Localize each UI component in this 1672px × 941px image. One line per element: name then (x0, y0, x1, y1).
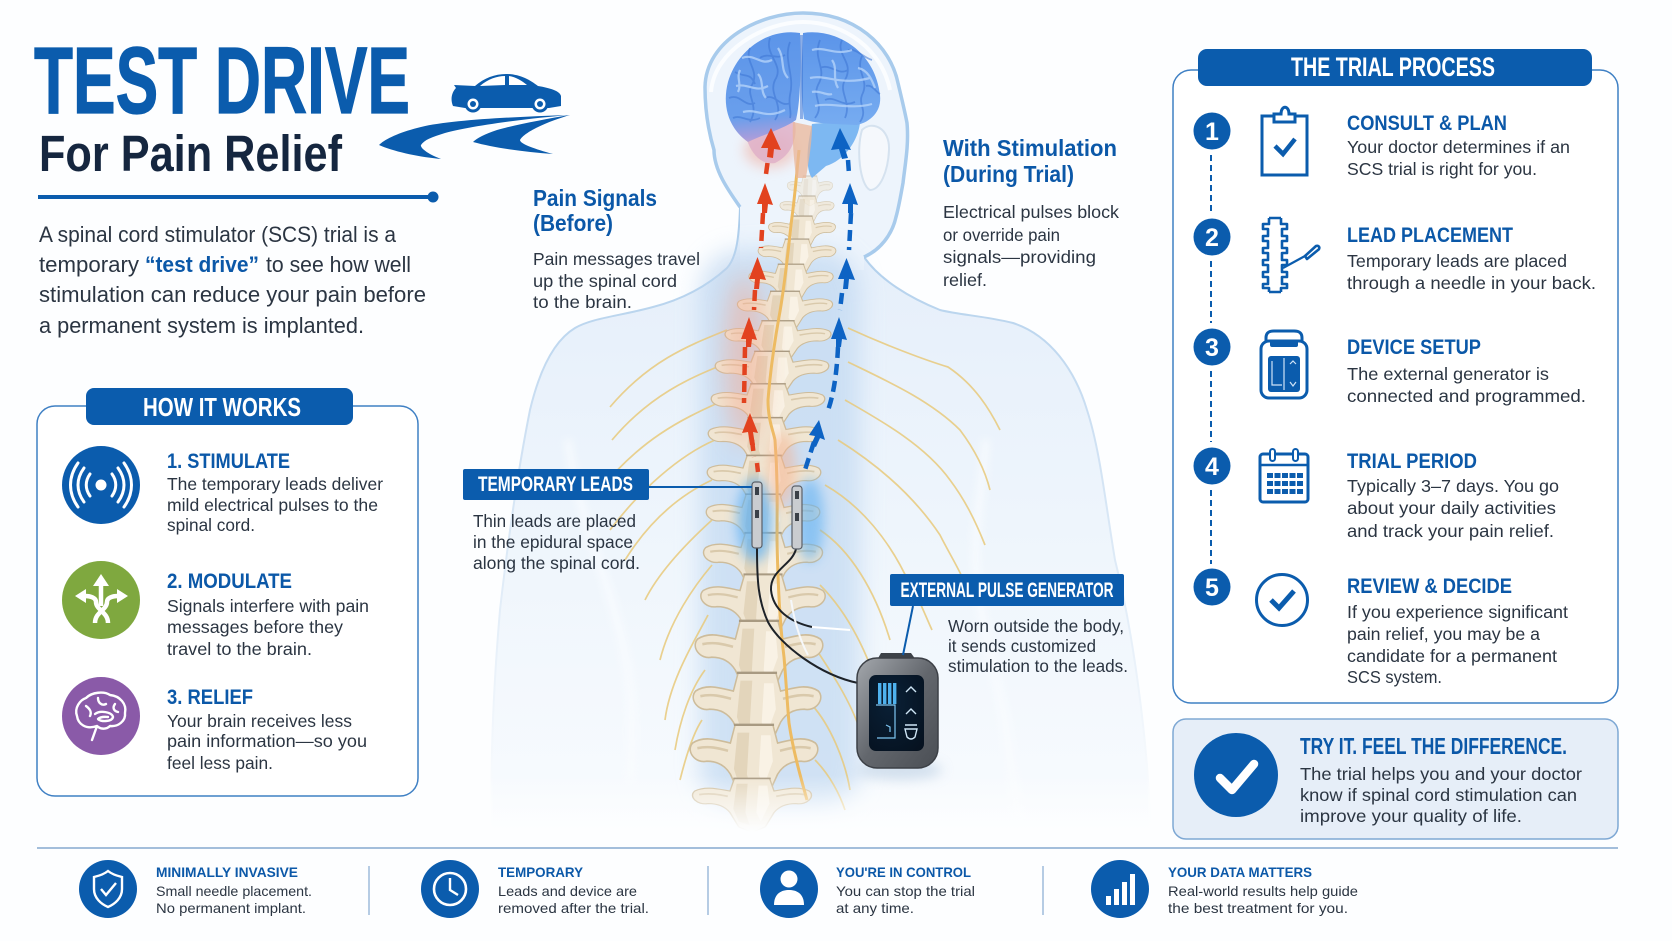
spine shading (700, 250, 860, 810)
ear (859, 126, 889, 190)
footer: temporary: TEMPORARY (498, 864, 584, 880)
step 5 text: REVIEW & DECIDE (1347, 575, 1512, 598)
illustration: back anatomy (470, 13, 1170, 846)
callout: try it feel the difference (1173, 719, 1618, 839)
step 4 text: TRIAL PERIOD (1347, 450, 1477, 473)
pain glow on spine (725, 132, 796, 445)
step 2 icon: spine and needle (1263, 218, 1319, 292)
head outline (705, 13, 908, 270)
text: modulate: travel to the brain. (167, 639, 312, 659)
icon: modulate (62, 561, 140, 639)
icon: car on road (379, 74, 570, 159)
text: relief: pain information—so you (167, 731, 367, 751)
text: stimulate: The temporary leads deliver (167, 474, 383, 494)
temporary leads (752, 482, 858, 683)
footer: you're in control: at any time. (836, 900, 914, 916)
body silhouette (491, 207, 1150, 835)
step 2 number: 2 (1205, 224, 1219, 252)
heading: how it works: HOW IT WORKS (143, 392, 301, 422)
step 3 text: DEVICE SETUP (1347, 336, 1481, 359)
step 4 text: about your daily activities (1347, 498, 1556, 518)
step 5 text: SCS system. (1347, 667, 1442, 687)
callout: pain signals before: (Before) (533, 210, 613, 236)
callout text: improve your quality of life. (1300, 806, 1522, 826)
step 5 text: If you experience significant (1347, 602, 1568, 622)
step 2 text: Temporary leads are placed (1347, 251, 1567, 271)
callout text: know if spinal cord stimulation can (1300, 785, 1577, 805)
heading: the trial process: THE TRIAL PROCESS (1291, 52, 1495, 82)
footer: your data matters (1091, 860, 1358, 918)
callout: pain signals before: up the spinal cord (533, 271, 677, 291)
callout: external pulse generator: it sends customized (948, 636, 1096, 656)
footer: minimally invasive: Small needle placement. (156, 883, 312, 899)
text: modulate: messages before they (167, 617, 343, 637)
external pulse generator device (857, 653, 942, 780)
nerves (600, 328, 1000, 810)
text: stimulate: 1. STIMULATE (167, 450, 290, 473)
step 1 text: CONSULT & PLAN (1347, 112, 1507, 135)
footer: minimally invasive: MINIMALLY INVASIVE (156, 864, 298, 880)
step 4 icon: calendar (1260, 449, 1308, 502)
step 5 text (1347, 575, 1568, 687)
callout: temporary leads: in the epidural space (473, 532, 633, 552)
brain (726, 32, 880, 178)
lead glow (737, 432, 824, 562)
step 1 text: Your doctor determines if an (1347, 137, 1570, 157)
footer: your data matters: YOUR DATA MATTERS (1168, 864, 1312, 880)
intro paragraph: a permanent system is implanted. (39, 313, 364, 338)
callout: temporary leads: along the spinal cord. (473, 553, 640, 573)
arrows: pain signals red (741, 128, 781, 472)
step 3 text (1347, 336, 1586, 406)
text: relief: feel less pain. (167, 753, 273, 773)
footer: minimally invasive: No permanent implant. (156, 900, 306, 916)
callout: temporary leads: Thin leads are placed (473, 511, 636, 531)
heading: how it works (86, 388, 353, 425)
text: modulate: 2. MODULATE (167, 570, 292, 593)
footer: you're in control: You can stop the trial (836, 883, 975, 899)
step 1 number (1194, 112, 1230, 150)
callout: with stimulation: or override pain (943, 225, 1060, 245)
text: modulate: Signals interfere with pain (167, 596, 369, 616)
intro paragraph (39, 222, 426, 338)
text: relief: Your brain receives less (167, 711, 352, 731)
intro paragraph: A spinal cord stimulator (SCS) trial is a (39, 222, 397, 247)
callout text: The trial helps you and your doctor (1300, 764, 1582, 784)
step 4 number: 4 (1205, 453, 1219, 481)
step 2 number (1194, 218, 1230, 256)
step 4 number (1194, 448, 1230, 484)
title: For Pain Relief (39, 125, 343, 182)
intro paragraph: temporary (39, 252, 139, 277)
step 5 number: 5 (1205, 574, 1219, 602)
text: relief: 3. RELIEF (167, 686, 253, 709)
intro paragraph: “test drive” (145, 252, 259, 277)
step 1 icon: clipboard (1262, 107, 1307, 175)
callout: external pulse generator: stimulation to the leads. (948, 656, 1128, 676)
title rule (38, 192, 438, 202)
step 1 text (1347, 112, 1570, 179)
callout: with stimulation: relief. (943, 270, 987, 290)
panel: how it works (37, 388, 418, 796)
step 2 text: through a needle in your back. (1347, 273, 1596, 293)
step 3 text: The external generator is (1347, 364, 1549, 384)
bottom rule (37, 847, 1618, 849)
step 5 number (1194, 568, 1230, 606)
callout: with stimulation: Electrical pulses block (943, 202, 1119, 222)
step 4 text (1347, 450, 1559, 541)
footer: you're in control (760, 860, 975, 918)
callout: external pulse generator: EXTERNAL PULSE GENERATOR (900, 579, 1114, 602)
callout: pain signals before (533, 185, 700, 312)
callout: with stimulation (943, 135, 1119, 290)
spinal cord (768, 150, 807, 800)
intro paragraph: to see how well (266, 252, 411, 277)
step 2 text: LEAD PLACEMENT (1347, 224, 1513, 247)
step 3 icon: device (1261, 331, 1307, 398)
step 4 text: Typically 3–7 days. You go (1347, 476, 1559, 496)
title (34, 28, 410, 182)
footer: your data matters: Real-world results help guide (1168, 883, 1358, 899)
heading: the trial process (1198, 49, 1592, 86)
footer: your data matters: the best treatment for you. (1168, 900, 1348, 916)
footer: temporary: removed after the trial. (498, 900, 649, 916)
text: stimulate: spinal cord. (167, 515, 255, 535)
step connector (1210, 155, 1212, 564)
step 1 number: 1 (1205, 118, 1219, 146)
step 1 text: SCS trial is right for you. (1347, 159, 1537, 179)
footer: temporary: Leads and device are (498, 883, 637, 899)
arrows: stimulation blue (804, 128, 858, 473)
panel: the trial process (1173, 49, 1618, 703)
callout: with stimulation: signals—providing (943, 247, 1096, 267)
step 3 text: connected and programmed. (1347, 386, 1586, 406)
callout: pain signals before: to the brain. (533, 292, 632, 312)
step 5 text: pain relief, you may be a (1347, 624, 1540, 644)
callout: with stimulation: (During Trial) (943, 161, 1074, 187)
step 4 text: and track your pain relief. (1347, 521, 1554, 541)
icon: stimulate (62, 446, 140, 524)
callout: external pulse generator: Worn outside the body, (948, 616, 1124, 636)
step 3 number: 3 (1205, 334, 1219, 362)
footer: temporary (421, 860, 649, 918)
callout: external pulse generator (890, 574, 1128, 676)
icon: large check (1194, 733, 1278, 817)
callout: pain signals before: Pain messages travel (533, 249, 700, 269)
vertebrae (690, 176, 836, 832)
intro paragraph: stimulation can reduce your pain before (39, 282, 426, 307)
step 5 icon: check circle (1256, 574, 1308, 626)
callout: temporary leads: TEMPORARY LEADS (478, 473, 633, 496)
callout: with stimulation: With Stimulation (943, 135, 1117, 161)
icon: relief brain (62, 677, 140, 755)
text: relief (167, 686, 367, 773)
callout text (1300, 733, 1582, 826)
step 5 text: candidate for a permanent (1347, 646, 1557, 666)
footer: minimally invasive (79, 860, 312, 918)
step 2 text (1347, 224, 1596, 293)
callout text: TRY IT. FEEL THE DIFFERENCE. (1300, 733, 1567, 759)
text: stimulate (167, 450, 383, 535)
callout: pain signals before: Pain Signals (533, 185, 657, 211)
text: stimulate: mild electrical pulses to the (167, 495, 378, 515)
fade to white at bottom (470, 775, 1170, 846)
title: TEST DRIVE (34, 28, 410, 134)
footer: you're in control: YOU'RE IN CONTROL (836, 864, 971, 880)
callout: temporary leads (463, 469, 752, 573)
step 3 number (1194, 328, 1230, 366)
text: modulate (167, 570, 369, 659)
